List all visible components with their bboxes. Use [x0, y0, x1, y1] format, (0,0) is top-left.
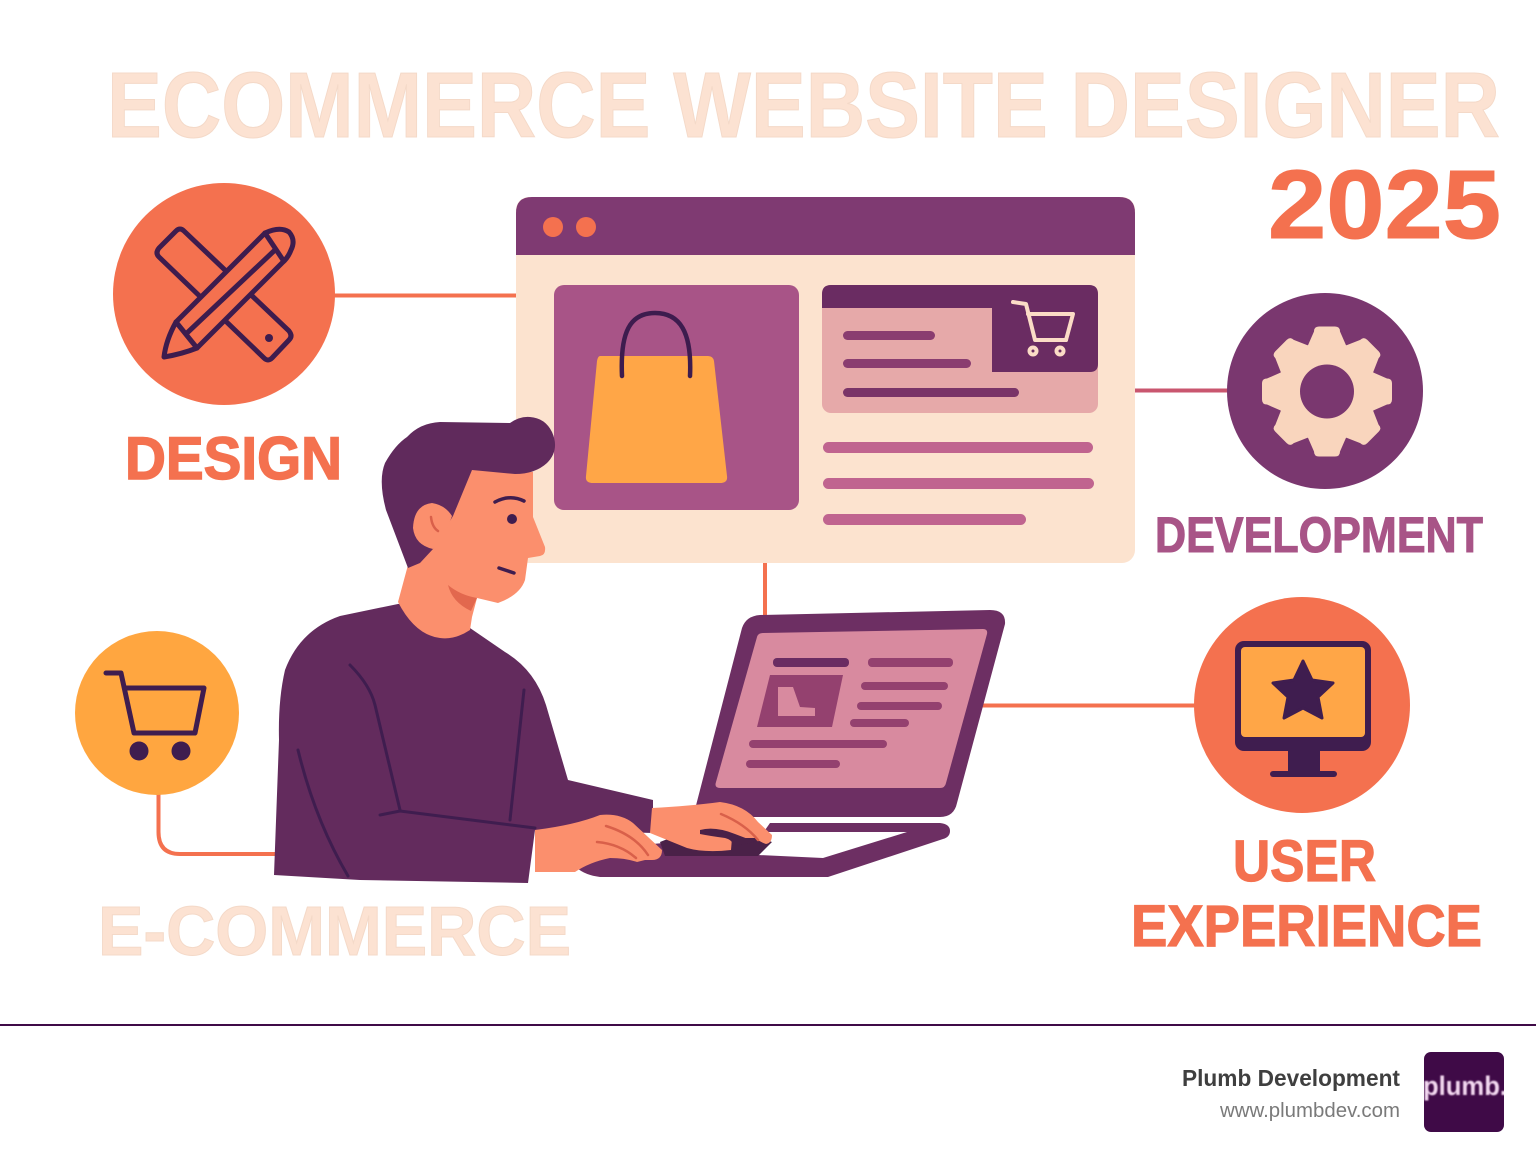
label: e-commerce: E-COMMERCE — [98, 892, 571, 970]
eye — [507, 514, 517, 524]
laptop screen — [716, 629, 987, 788]
title year: 2025: 2025 — [1268, 150, 1501, 259]
laptop lid — [693, 610, 1005, 817]
product info panel — [822, 285, 1098, 413]
browser title bar — [516, 197, 1135, 255]
laptop screen content — [746, 658, 953, 768]
footer: brand text — [1182, 1065, 1400, 1122]
connector: e-commerce to person — [158, 792, 280, 854]
icon circle: e-commerce — [75, 631, 239, 795]
shirt — [274, 600, 653, 883]
connector: browser to laptop — [763, 560, 767, 618]
icon circle: design — [113, 183, 335, 405]
eyebrow — [495, 498, 524, 502]
laptop keyboard base — [577, 823, 950, 877]
label: user experience: USER — [1233, 829, 1376, 894]
icon circle: development — [1227, 293, 1423, 489]
icon: shopping cart — [106, 673, 204, 760]
product image panel — [554, 285, 799, 510]
connector: laptop to user experience — [980, 704, 1198, 708]
label: design: DESIGN — [125, 425, 342, 492]
icon circle: user experience — [1194, 597, 1410, 813]
back hand thumb gap — [700, 829, 756, 846]
hair — [382, 417, 555, 568]
footer: brand text: www.plumbdev.com — [1219, 1100, 1400, 1122]
label: user experience — [1131, 829, 1482, 959]
icon: shopping bag — [586, 313, 727, 483]
icon: pencil — [164, 229, 293, 357]
person — [274, 417, 772, 883]
front hand — [535, 815, 662, 872]
ear detail — [431, 517, 438, 531]
footer: logo — [1423, 1052, 1507, 1132]
mouth — [499, 568, 514, 573]
icon: monitor with star — [1235, 641, 1371, 777]
browser body — [516, 197, 1135, 563]
front hand finger lines — [597, 826, 648, 858]
connector: design to browser — [330, 294, 518, 298]
label: user experience: EXPERIENCE — [1131, 894, 1482, 959]
laptop — [577, 610, 1005, 877]
ear — [413, 503, 452, 549]
shirt fold lines — [298, 665, 535, 876]
label: development: DEVELOPMENT — [1155, 507, 1483, 563]
back hand — [650, 802, 772, 851]
text placeholder lines — [823, 442, 1094, 525]
neck and face — [398, 468, 545, 638]
connector: browser to development — [1133, 388, 1232, 392]
footer: brand text: Plumb Development — [1182, 1065, 1400, 1091]
neck shadow — [448, 585, 477, 611]
mouse under hand — [660, 832, 772, 856]
icon: ruler — [157, 229, 291, 360]
back hand finger line — [721, 814, 758, 840]
icon: gear — [1262, 326, 1392, 456]
browser dots — [543, 217, 596, 237]
icon: small cart — [1013, 302, 1073, 354]
panel: browser window — [516, 197, 1135, 563]
footer divider — [0, 1024, 1536, 1026]
